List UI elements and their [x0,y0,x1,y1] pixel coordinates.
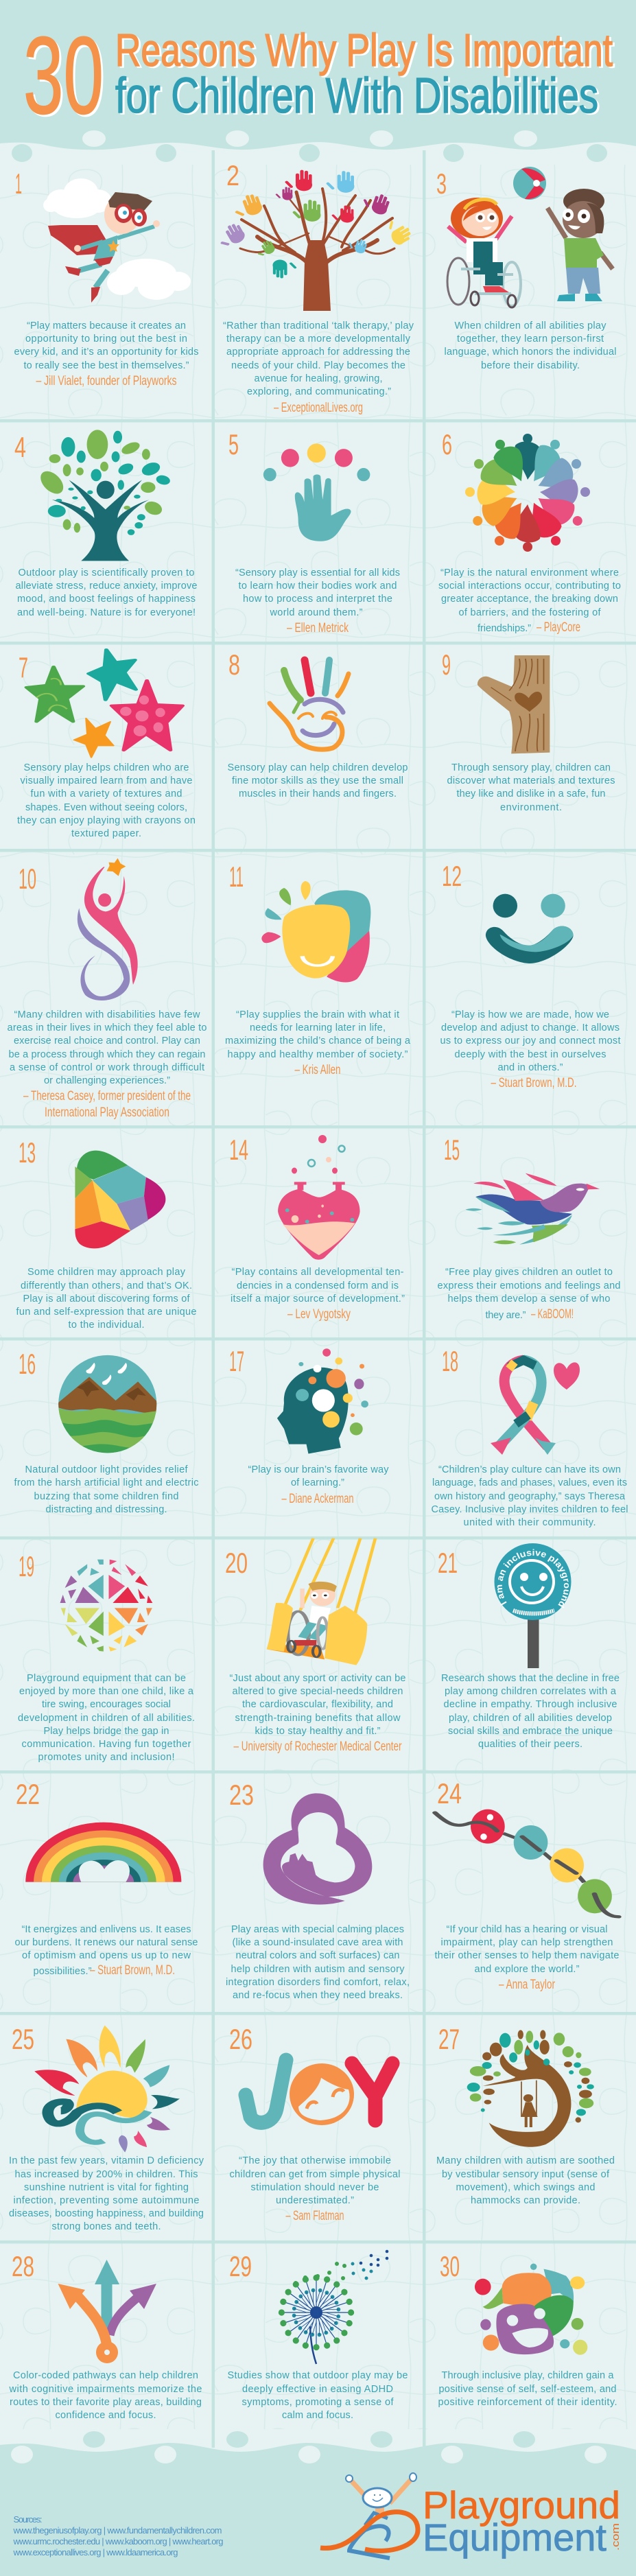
panel: reason 30 [426,2244,636,2448]
title: 30 [25,16,106,139]
quote text: “Play is the natural environment where [440,567,619,578]
quote text: “Sensory play is essential for all kids [235,567,400,578]
number 18: 18 [442,1345,458,1377]
text block: calm and focus. [282,2410,353,2421]
text block [436,2155,615,2206]
number 30: 30 [440,2250,460,2282]
quote text [231,1267,405,1304]
quote text: exercise real choice and control. Play can [14,1035,200,1046]
text block: language, which honors the individual [445,347,616,358]
text block: play, children of all abilities develop [449,1713,612,1724]
quote text: needs of your child. Play becomes the [231,360,405,371]
panel: reason 15 [426,1129,636,1337]
icon: tree with swinging child [467,2030,594,2147]
quote text [14,320,199,371]
text block: Many children with autism are soothed [436,2155,615,2166]
text block: Natural outdoor light provides relief [25,1464,188,1475]
quote text: “The joy that otherwise immobile [239,2155,391,2166]
number 23: 23 [229,1779,254,1811]
text block: deeply effective in easing ADHD [242,2384,393,2395]
quote text: greater acceptance, the breaking down [441,594,618,605]
number 7: 7 [19,651,28,683]
panel: reason 11 [215,852,423,1125]
quote text: united with their community. [464,1517,596,1528]
text block: muscles in their hands and fingers. [239,788,397,799]
quote text: and in others.” [498,1062,563,1073]
icon: landscape egg [57,1355,158,1455]
panel: reason 13 [0,1129,211,1337]
icon: colorful bird [465,1173,600,1245]
number 20: 20 [225,1547,248,1579]
text block: symptoms, promoting a sense of [242,2397,394,2408]
number 10: 10 [19,863,36,895]
panel: reason 1: 1 [15,167,22,200]
text block: buzzing that some children find [34,1491,178,1502]
quote text: world around them.” [269,607,363,618]
quote text [15,1924,198,1977]
quote text: impairment, play can help strengthen [440,1937,613,1948]
quote text: helps them develop a sense of who [447,1293,611,1304]
text block [15,567,198,618]
quote text: every kid, and it’s an opportunity for kids [14,347,199,358]
text block: infection, preventing some autoimmune [14,2195,199,2206]
panel: reason 3 [426,150,636,419]
number 4: 4 [14,431,26,463]
text block: fine motor skills as they use the small [232,775,403,786]
quote text: dencies in a condensed form and is [237,1280,399,1291]
attribution: – Jill Vialet, founder of Playworks [36,374,177,388]
text block: shapes. Even without seeing colors, [25,802,187,813]
text block: Through inclusive play, children gain a [442,2370,614,2381]
text block: development in children of all abilities. [18,1713,195,1724]
panel: reason 21 [438,1543,620,1750]
text block: Research shows that the decline in free [441,1673,620,1684]
panel: reason 5 [215,423,423,642]
sources: www.thegeniusofplay.org | www.fundamentallychildren.com [12,2525,222,2536]
panel: reason 4 [0,423,211,642]
number 6: 6 [442,428,452,460]
number 16: 16 [19,1348,36,1380]
text block: Play is all about discovering forms of [23,1293,190,1304]
text block [9,2155,204,2232]
sources: www.urmc.rochester.edu | www.kaboom.org | www.heart.org [12,2536,224,2546]
text block: qualities of their peers. [478,1739,582,1750]
wordmark: Equipment [423,2516,606,2559]
number 8: 8 [228,648,240,681]
icon: tree person [36,430,173,561]
quote text: “Just about any sport or activity can be [229,1673,406,1684]
text block: discover what materials and textures [447,775,615,786]
logo: Playground Equipment [320,2473,622,2559]
attribution: – Lev Vygotsky [287,1307,351,1322]
quote text: develop and adjust to change. It allows [441,1022,620,1033]
text block: positive reinforcement of their identity. [438,2397,617,2408]
text block: with cognitive impairments memorize the [8,2384,202,2395]
text block [14,1464,199,1515]
wordmark: .com [610,2523,622,2551]
quote text: “It energizes and enlivens us. It eases [22,1924,191,1935]
number 26: 26 [229,2023,252,2055]
sources [12,2514,224,2557]
quote text [223,320,414,397]
attribution: – Stuart Brown, M.D. [491,1076,576,1090]
quote text: avenue for healing, growing, [254,373,383,384]
panel: reason 7 [0,645,211,849]
quote text: maximizing the child’s chance of being a [225,1035,411,1046]
text block: help children with autism and sensory [231,1964,405,1975]
text block: integration disorders find comfort, relax, [226,1977,410,1988]
icon: superhero child [43,178,191,303]
quote text: stimulation should never be [251,2182,379,2193]
icon: inclusive playground sign [494,1543,571,1668]
text block: (like a sound-insulated cave area with [232,1937,403,1948]
icon: buttons on string [435,1810,619,1917]
sources: Sources: [14,2514,43,2525]
number 22: 22 [16,1778,40,1810]
panel: reason 25 [0,2015,211,2240]
panel: reason 20 [215,1538,423,1770]
icon: textured stars [26,650,182,758]
icon: rainbow with heart [25,1823,181,1882]
icon: colorful laughing face [475,2264,587,2355]
text block: movement), which swings and [456,2182,596,2193]
number 13: 13 [19,1136,36,1169]
panel: reason 17: 17 [229,1345,244,1377]
text block [18,1673,195,1763]
text block: by vestibular sensory input (sense of [442,2169,610,2180]
text block: hammocks can provide. [471,2195,580,2206]
text block: alleviate stress, reduce anxiety, improve [15,581,198,592]
number 21: 21 [438,1547,458,1579]
text block: enjoyed by more than one child, like a [19,1686,194,1697]
quote text: exploring, and communicating.” [247,386,391,397]
panel: reason 11: 11 [229,860,244,893]
text block: In the past few years, vitamin D deficiency [9,2155,204,2166]
quote text: areas in their lives in which they feel able to [7,1022,207,1033]
title [23,14,615,139]
text block: Outdoor play is scientifically proven to [18,567,195,578]
text block: Color-coded pathways can help children [13,2370,198,2381]
quote text: kids to stay healthy and fit.” [255,1726,381,1737]
panel: reason 17 [215,1341,423,1536]
attribution: International Play Association [45,1105,169,1120]
quote text: “Rather than traditional ‘talk therapy,’ play [223,320,414,331]
attribution [23,1089,191,1120]
icon: embracing figure [263,1793,372,1904]
icon: heart flask [278,1135,360,1260]
icon: smiling brain blob [261,881,370,982]
text block: diseases, boosting happiness, and building [9,2208,204,2219]
quote text [229,2155,401,2206]
quote text: therapy can be a more developmentally [226,333,411,344]
text block: social skills and embrace the unique [448,1726,613,1737]
quote text: the cardiovascular, flexibility, and [242,1699,393,1710]
quote text: be a process through which they can regain [8,1049,206,1060]
icon: swing with wheelchair [267,1538,375,1665]
text block: distracting and distressing. [45,1504,167,1515]
icon: hand with dots [263,443,370,541]
text block: decline in empathy. Through inclusive [443,1699,617,1710]
attribution: – Ellen Metrick [287,621,349,635]
quote text: deeply with the best in ourselves [454,1049,606,1060]
quote text: “Play matters because it creates an [27,320,186,331]
text block: Play helps bridge the gap in [44,1726,169,1737]
quote text: of barriers, and the fostering of [458,607,601,618]
quote text: “Many children with disabilities have few [14,1009,200,1020]
quote text: their other senses to help them navigate [435,1950,619,1961]
quote text [7,1009,207,1086]
attribution: – Diane Ackerman [281,1492,354,1506]
text block [441,1673,620,1750]
text block [16,1267,196,1331]
text block: Play areas with special calming places [231,1924,404,1935]
quote text: “Play is how we are made, how we [451,1009,609,1020]
text block: visually impaired learn from and have [21,775,192,786]
text block [447,762,615,813]
number 2: 2 [226,159,239,191]
quote text: children can get from simple physical [229,2169,401,2180]
number 5: 5 [228,428,239,460]
quote text: to really see the best in themselves.” [23,360,189,371]
wordmark [423,2483,622,2559]
quote text: a sense of control or work through difficult [10,1062,204,1073]
panel: reason 9 [426,645,636,849]
attribution: – Theresa Casey, former president of the [23,1089,191,1103]
icon: tree of hands [215,170,414,311]
icon: branching arrows [58,2260,156,2363]
attribution: – Anna Taylor [499,1978,555,1992]
icon: JOY letters with face [246,2060,392,2125]
text block: Sensory play helps children who are [23,762,189,773]
text block: from the harsh artificial light and electric [14,1477,199,1488]
attribution: – PlayCore [537,620,580,635]
quote text: Casey. Inclusive play invites children to feel [431,1504,628,1515]
icon: puzzle ribbon [491,1360,580,1455]
quote text [431,1464,628,1528]
attribution: – Stuart Brown, M.D. [90,1963,175,1978]
icon: polygon play button [75,1151,165,1248]
panel: reason 12 [426,852,636,1125]
icon: head with ideas [277,1348,368,1453]
text block: environment. [500,802,562,813]
text block: neutral colors and soft surfaces) can [236,1950,399,1961]
panel: reason 16 [14,1354,199,1514]
wordmark: Playground [423,2483,620,2527]
quote text: happy and healthy member of society.” [228,1049,408,1060]
panel: reason 26 [215,2015,423,2240]
text block: they like and dislike in a safe, fun [457,788,605,799]
text block: together, they learn person-first [457,333,604,344]
text block: confidence and focus. [55,2410,156,2421]
quote text: express their emotions and feelings and [438,1280,620,1291]
panel: reason 19 [0,1540,211,1770]
number 27: 27 [438,2023,460,2055]
icon: dandelion [279,2250,388,2364]
text block: positive sense of self, self-esteem, and [439,2384,616,2395]
panel: reason 14 [215,1129,423,1337]
number 28: 28 [12,2250,34,2282]
quote text: possibilities.” [33,1966,92,1977]
text block: Through sensory play, children can [451,762,611,773]
text block: tire swing, encourages social [42,1699,171,1710]
icon: child on slide [320,2473,418,2558]
quote text [235,567,400,618]
quote text [435,1924,619,1975]
attribution: – Kris Allen [295,1063,340,1077]
number 14: 14 [229,1134,248,1166]
text block: and re-focus when they need breaks. [233,1990,403,2001]
icon: smiley with hug [486,894,574,963]
panel: reason 22 [0,1774,211,2012]
panel: reason 23 [215,1774,423,2012]
text block: to the individual. [69,1320,144,1331]
text block: before their disability. [481,360,580,371]
number 12: 12 [442,860,462,892]
text block: they can enjoy playing with crayons on [17,815,196,826]
quote text: our burdens. It renews our natural sense [15,1937,198,1948]
text block: routes to their favorite play areas, building [10,2397,202,2408]
quote text: “Play supplies the brain with what it [236,1009,399,1020]
icon: inclusive playground sign: I am an inclusive playground [497,1549,569,1608]
text block: communication. Having fun together [22,1739,191,1750]
quote text: own history and geography,” says Theresa [434,1491,626,1502]
icon: figure reaching for star [78,858,138,1000]
number 9: 9 [442,648,451,681]
sources: www.exceptionallives.org | www.ldaamerica.org [12,2547,178,2557]
text block: promotes unity and inclusion! [38,1752,174,1763]
text block: When children of all abilities play [454,320,606,331]
text block: fun and self-expression that are unique [16,1307,196,1318]
text block: Playground equipment that can be [27,1673,186,1684]
text block: differently than others, and that’s OK. [21,1280,192,1291]
attribution: – ExceptionalLives.org [274,401,363,415]
panel: reason 2 [215,150,423,419]
quote text: friendships.” [478,623,531,634]
quote text: of learning.” [291,1477,344,1488]
quote text: “Children’s play culture can have its own [438,1464,621,1475]
attribution: – KaBOOM! [531,1307,574,1322]
text block: strong bones and teeth. [52,2221,161,2232]
quote text: to learn how their bodies work and [239,581,397,592]
text block [17,762,196,839]
quote text: language, fads and phases, values, even its [432,1477,627,1488]
panel: reason 10 [0,852,211,1125]
quote text [438,567,621,634]
quote text: us to express our joy and connect most [440,1035,620,1046]
quote text: or challenging experiences.” [44,1075,170,1086]
icon: handprint smiley [270,660,349,749]
text block [228,762,408,799]
quote text: how to process and interpret the [243,594,392,605]
number 3: 3 [436,167,447,200]
text block [438,2370,617,2408]
icon: circle of people [465,434,590,552]
number 29: 29 [229,2250,252,2282]
text block [226,1924,410,2001]
quote text [438,1267,620,1321]
quote text: “If your child has a hearing or visual [446,1924,608,1935]
quote text: social interactions occur, contributing to [438,581,621,592]
quote text: and explore the world.” [475,1964,580,1975]
panel: reason 29 [215,2244,423,2448]
text block: sunshine nutrient is vital for fighting [24,2182,189,2193]
quote text: “Free play gives children an outlet to [445,1267,613,1278]
quote text [440,1009,620,1073]
quote text: “Play is our brain’s favorite way [248,1464,389,1475]
text block: textured paper. [71,828,141,839]
quote text: altered to give special-needs children [232,1686,403,1697]
quote text: needs for learning later in life, [250,1022,386,1033]
text block [445,320,616,371]
icon: tree trunk with heart [478,655,550,753]
attribution: – Sam Flatman [285,2209,344,2223]
text block [228,2370,408,2421]
panel: reason 28 [0,2244,211,2448]
quote text: of optimism and opens us up to new [22,1950,191,1961]
icon: children playing with ball [447,167,613,307]
panel: reason 27 [426,2015,636,2240]
text block: Some children may approach play [27,1267,186,1278]
text block: has increased by 200% in children. This [15,2169,198,2180]
text block [8,2370,202,2421]
text block: and well-being. Nature is for everyone! [17,607,196,618]
quote text: appropriate approach for addressing the [226,347,410,358]
panel: reason 6 [426,423,636,642]
number 24: 24 [437,1777,462,1810]
quote text: opportunity to bring out the best in [25,333,187,344]
attribution: – University of Rochester Medical Center [233,1740,402,1754]
quote text: “Play contains all developmental ten- [232,1267,404,1278]
text block: mood, and boost feelings of happiness [17,594,196,605]
panel: reason 24 [426,1774,636,2012]
panel: reason 18 [426,1341,636,1536]
panel: reason 19: 19 [19,1550,34,1582]
text block: Studies show that outdoor play may be [228,2370,408,2381]
quote text: they are.” [486,1310,526,1321]
quote text [248,1464,389,1488]
icon: mosaic circle [60,1560,152,1652]
quote text: itself a major source of development.” [231,1293,405,1304]
panel: reason 8 [215,645,423,849]
title: 30 [23,14,104,137]
quote text: underestimated.” [276,2195,354,2206]
panel: reason 15: 15 [444,1134,460,1166]
quote text: strength-training benefits that allow [235,1713,401,1724]
text block: play among children correlates with a [445,1686,617,1697]
quote text [225,1009,411,1060]
panel: reason 1 [0,150,211,419]
icon: decorative sun [34,2026,180,2153]
quote text [229,1673,406,1737]
number 25: 25 [12,2023,34,2055]
text block: Sensory play can help children develop [228,762,408,773]
text block: fun with a variety of textures and [30,788,182,799]
